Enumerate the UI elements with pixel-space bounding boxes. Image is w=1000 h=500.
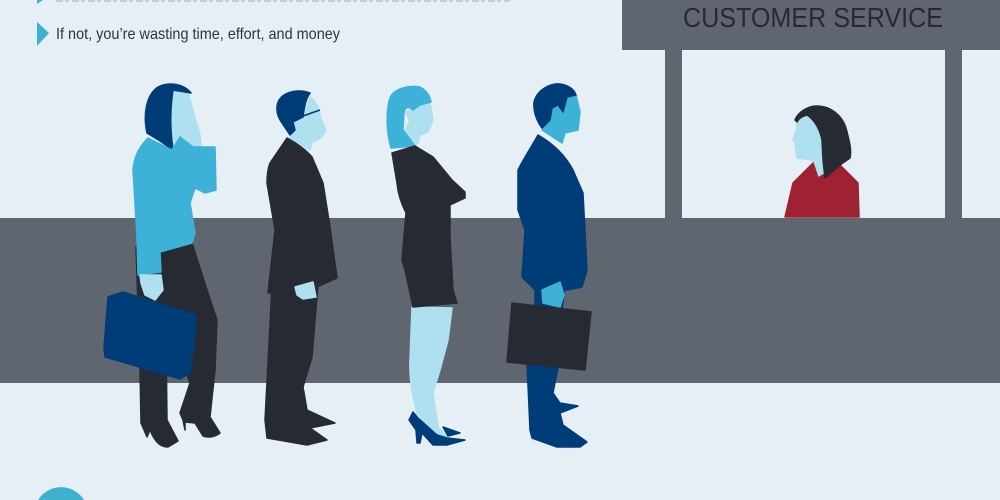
top — [133, 137, 216, 275]
cut-off teal circle icon — [38, 487, 84, 500]
cut-off bullet arrow at top — [37, 0, 43, 4]
cut-off top text line remnants — [56, 0, 510, 2]
trousers — [527, 363, 587, 447]
face — [542, 95, 580, 143]
dress — [392, 146, 465, 307]
front shoe — [409, 412, 465, 445]
back leg — [136, 247, 178, 447]
person: man with glasses — [265, 91, 337, 445]
suit jacket — [267, 138, 337, 293]
face — [290, 97, 326, 150]
hair — [387, 86, 431, 148]
hair — [277, 91, 310, 135]
red top — [785, 163, 859, 217]
legs — [410, 307, 452, 437]
hand — [295, 282, 316, 299]
briefcase — [507, 303, 591, 370]
bullet arrow — [37, 22, 49, 46]
trousers — [265, 285, 335, 445]
person: woman with crossed arms — [387, 86, 465, 445]
briefcase — [104, 292, 196, 379]
glasses — [303, 110, 320, 116]
hair — [795, 106, 851, 178]
person: man with black briefcase — [507, 84, 591, 447]
hair — [534, 84, 576, 128]
suit jacket — [518, 135, 587, 290]
bullet text: If not, you’re wasting time, effort, and money — [56, 26, 340, 43]
hand — [542, 282, 564, 307]
hair — [145, 84, 191, 150]
face and neck — [793, 115, 824, 178]
sign: customer service: CUSTOMER SERVICE — [683, 2, 943, 33]
hand on handle — [140, 275, 163, 300]
front leg — [160, 243, 220, 437]
back shoe — [443, 427, 460, 436]
person: woman on phone with briefcase — [104, 84, 220, 447]
service counter building — [0, 0, 1000, 383]
face and hand — [171, 90, 201, 150]
face — [403, 102, 433, 146]
person: clerk behind counter — [785, 106, 859, 217]
